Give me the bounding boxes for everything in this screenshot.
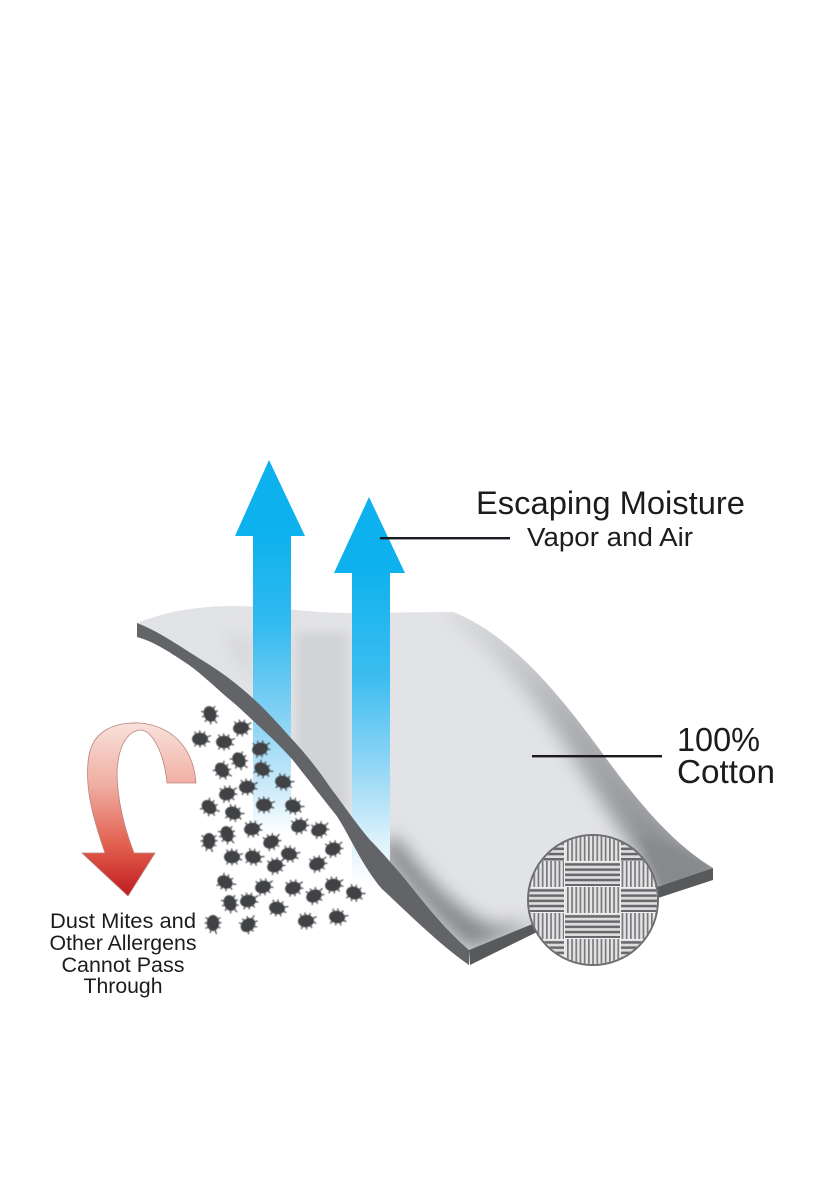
label: cotton <box>677 721 775 790</box>
label: escaping moisture: Vapor and Air <box>527 524 694 552</box>
label: cotton: 100% <box>677 721 760 758</box>
label: escaping moisture <box>476 485 745 552</box>
label: cotton: Cotton <box>677 753 775 790</box>
dust mites cluster <box>192 704 367 937</box>
leader line: cotton <box>532 755 662 757</box>
label: dust mites: Cannot Pass <box>62 954 184 977</box>
label: dust mites <box>50 910 196 998</box>
label: dust mites: Through <box>84 975 162 998</box>
fabric weave magnifier <box>525 835 660 965</box>
arrow: moisture vapor left <box>235 460 305 835</box>
fabric illustration <box>120 460 730 970</box>
label: dust mites: Dust Mites and <box>50 910 196 933</box>
label: dust mites: Other Allergens <box>50 932 196 955</box>
arrow: allergens deflected <box>82 723 196 896</box>
label: escaping moisture: Escaping Moisture <box>476 485 745 521</box>
arrow: moisture vapor right <box>334 497 405 885</box>
leader line: moisture <box>380 537 510 539</box>
fabric top surface <box>138 606 713 950</box>
fabric edge bands <box>137 623 713 965</box>
